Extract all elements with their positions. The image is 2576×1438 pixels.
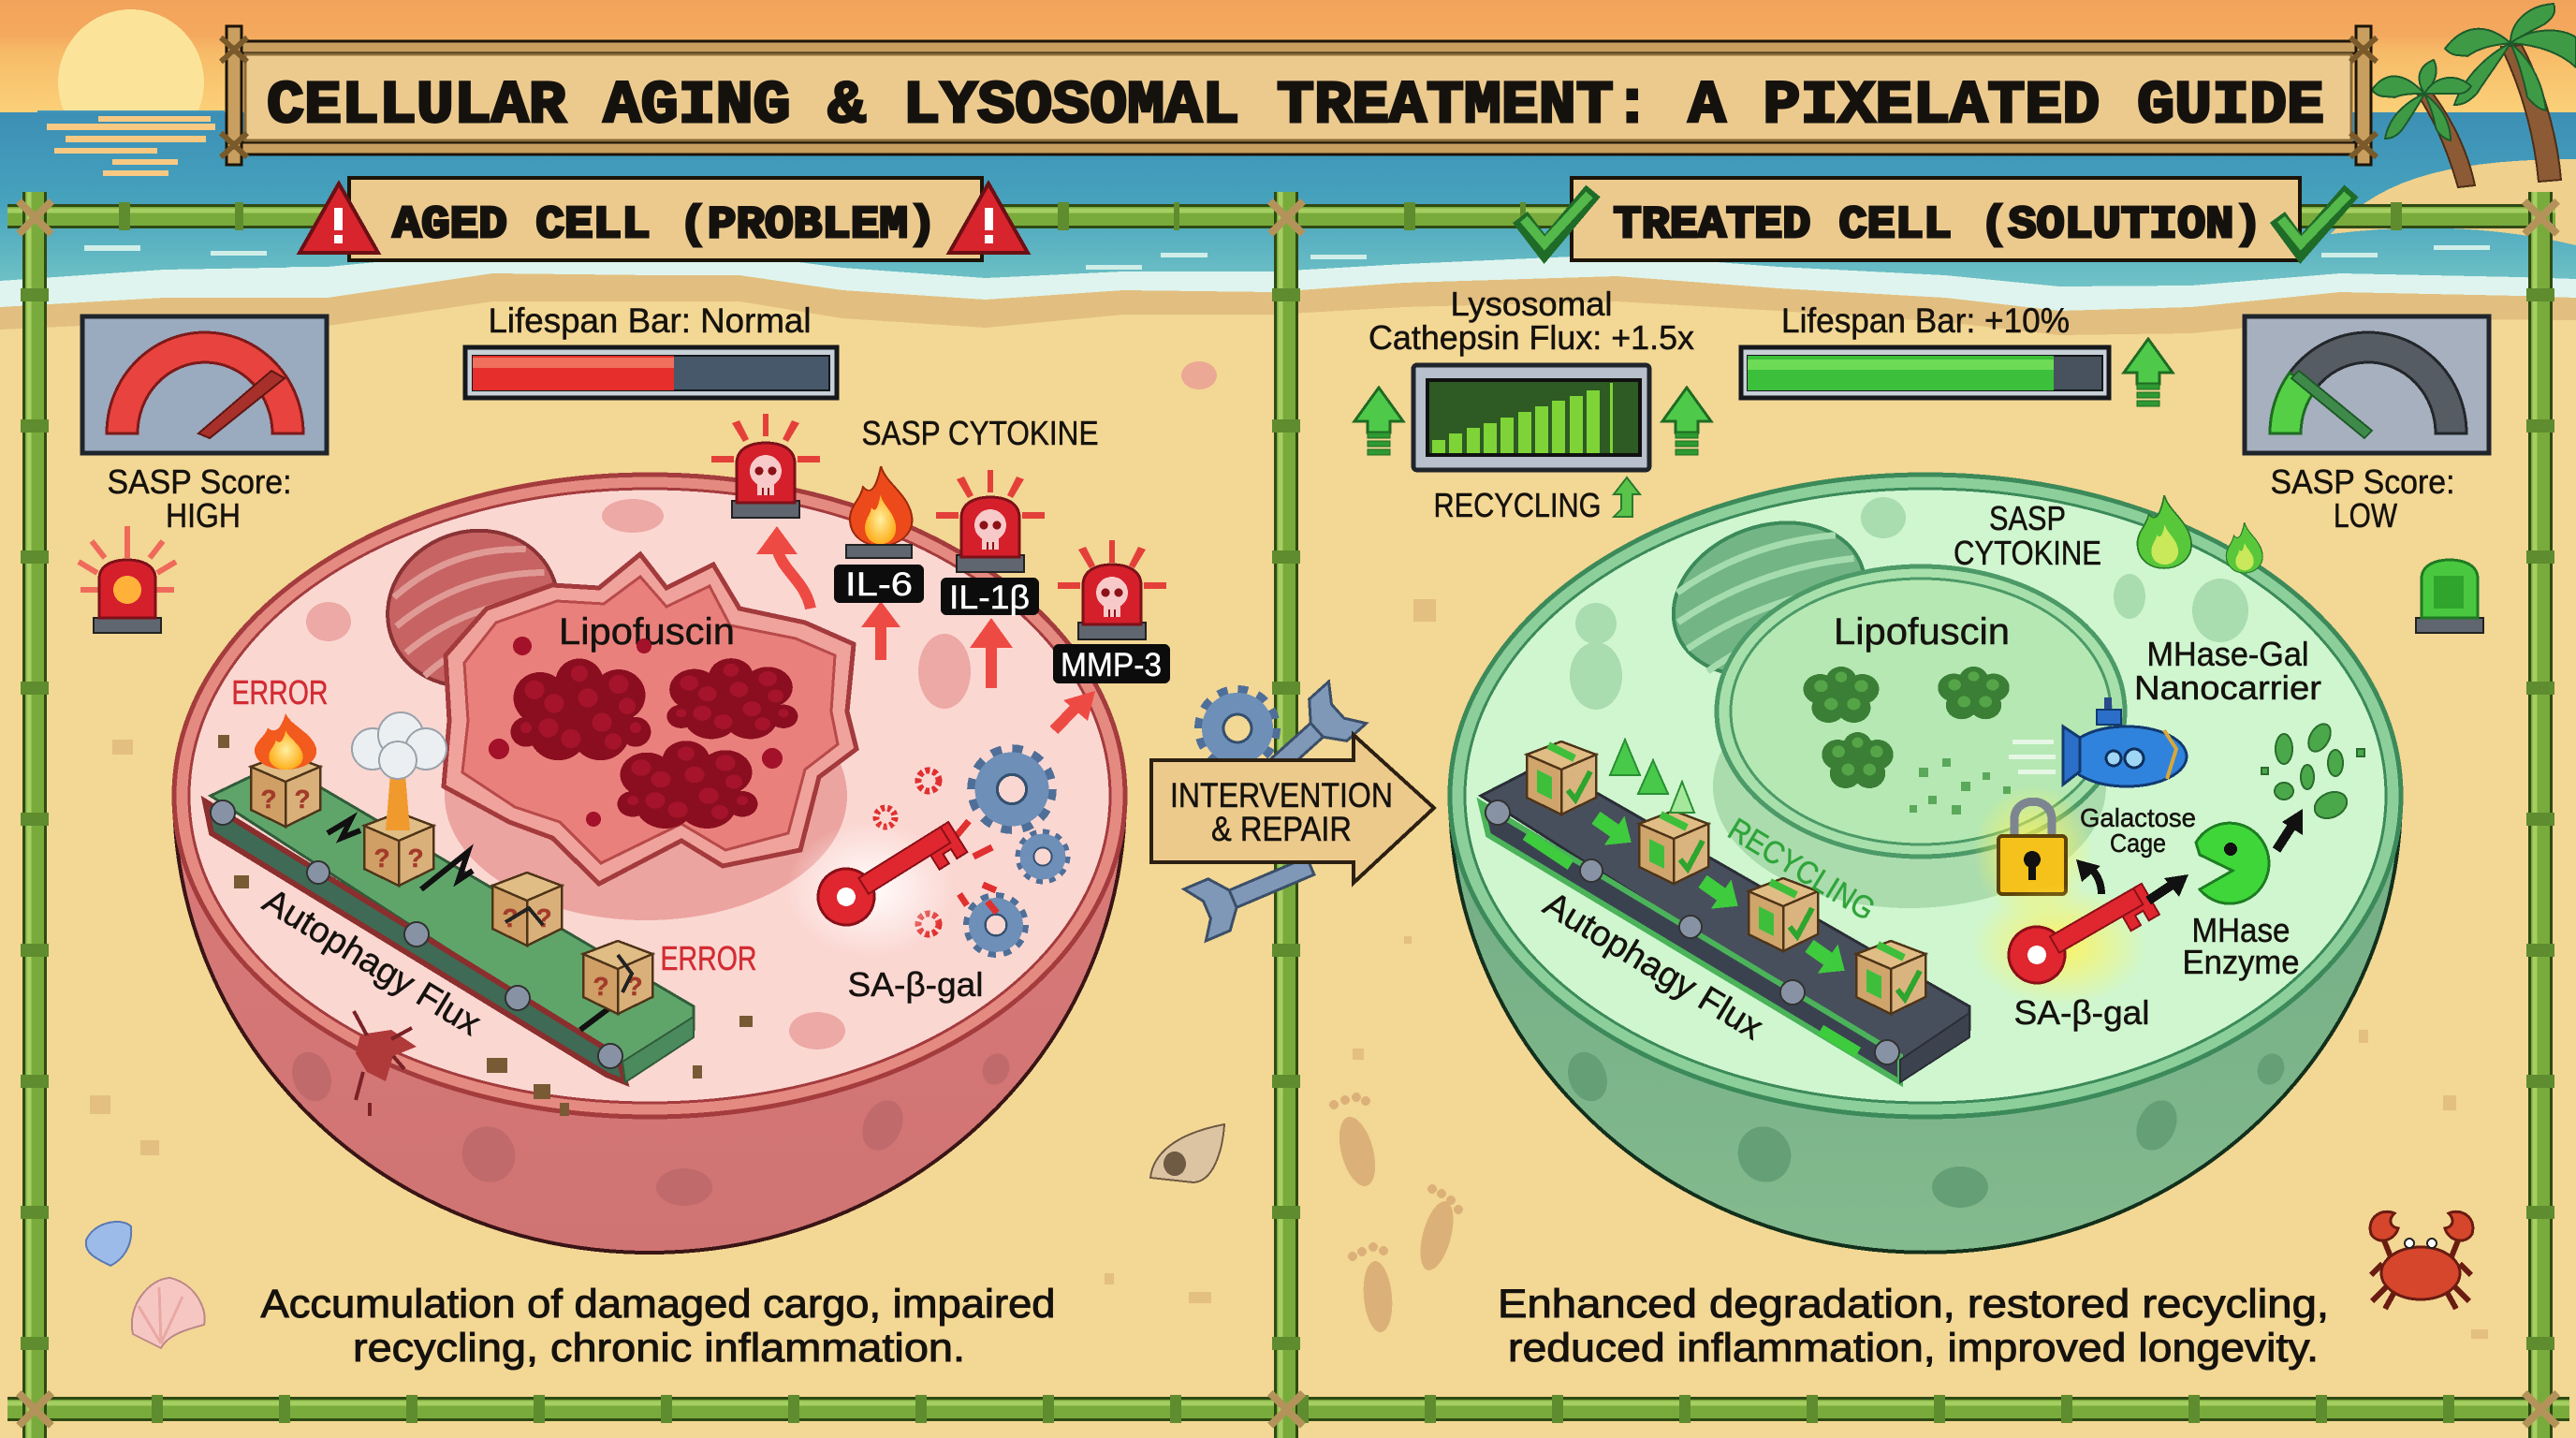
- label: autophagy flux: Autophagy Flux: [256, 881, 488, 1044]
- arrow text: [1170, 776, 1393, 848]
- label: lifespan normal: Lifespan Bar: Normal: [489, 301, 811, 340]
- label: SASP cytokine: CYTOKINE: [1954, 534, 2101, 572]
- key: SA-beta-gal aged: [786, 806, 968, 957]
- lysosome shadow: [1713, 665, 2106, 908]
- caption: treated cell: Enhanced degradation, restored recycling,: [1498, 1282, 2329, 1327]
- lifespan bar: +10%: [1741, 347, 2109, 398]
- damaged lysosome: [444, 554, 856, 884]
- palm island: [2331, 159, 2576, 245]
- icon: siren MMP-3 skull: [1058, 540, 1166, 639]
- cell body side: [1450, 796, 2401, 1253]
- gears: [968, 750, 1067, 953]
- heading text: aged cell: AGED CELL (PROBLEM): [393, 200, 936, 251]
- mitochondrion: [366, 506, 579, 711]
- lipofuscin clumps: [489, 637, 798, 829]
- label: nanocarrier: MHase-Gal: [2147, 635, 2308, 673]
- cell membrane rim: [1450, 475, 2401, 1117]
- label: IL-6: [834, 565, 924, 603]
- label: SASP score high: [107, 462, 292, 535]
- label: autophagy flux: Autophagy Flux: [1537, 885, 1769, 1048]
- label: SA-beta-gal aged: SA-β-gal: [848, 965, 983, 1004]
- healthy lysosome: [1717, 566, 2125, 857]
- label: IL-1beta: IL-1β: [949, 580, 1030, 616]
- label: lipofuscin: Lipofuscin: [559, 611, 735, 653]
- icon: blue shell: [86, 1222, 131, 1266]
- label: SASP cytokine: [1954, 499, 2101, 572]
- label: SASP score low: [2271, 462, 2454, 535]
- caption: aged cell: recycling, chronic inflammation.: [353, 1326, 965, 1371]
- red enzyme fragments: [876, 770, 997, 934]
- label: lipofuscin: Lipofuscin: [1834, 611, 2010, 653]
- cytoplasm spots: [306, 499, 971, 1049]
- cytoplasm spots: [1570, 497, 2248, 710]
- label: lifespan +10%: Lifespan Bar: +10%: [1781, 301, 2070, 340]
- gauge: SASP high: [82, 316, 327, 453]
- wave highlights: [84, 245, 2490, 271]
- caption: aged cell: [260, 1282, 1056, 1371]
- label: SASP cytokine: SASP: [1989, 499, 2066, 537]
- treated boxes: [1527, 741, 1925, 1014]
- icon: siren IL-1beta skull: [936, 470, 1045, 572]
- lifespan bar: normal: [465, 347, 837, 398]
- label: mhase enzyme: [2183, 911, 2299, 981]
- icon: green flame large: [2138, 495, 2191, 568]
- red signalling arrows: [777, 548, 1076, 730]
- icon: membrane tear: [354, 1011, 417, 1116]
- label: error bottom: ERROR: [661, 939, 756, 977]
- label: galactose cage: [2080, 803, 2196, 858]
- green triangles: [1610, 740, 1694, 813]
- icon: lifespan up arrow: [2124, 339, 2173, 406]
- conveyor belt: [1481, 763, 1969, 1082]
- label: SASP score low: LOW: [2334, 496, 2397, 535]
- icon: siren IL-? skull 1: [711, 414, 820, 518]
- label: SA-beta-gal treated: SA-β-gal: [2014, 993, 2149, 1032]
- icon: flux up arrow left: [1354, 388, 1403, 455]
- panel: aged cell: [174, 414, 1170, 1253]
- label: SASP score high: HIGH: [166, 496, 241, 535]
- cytoplasm: [1465, 489, 2386, 1103]
- icon: smoke explosion: [352, 712, 446, 830]
- icon: green alarm light: [2416, 560, 2483, 633]
- label: mhase enzyme: MHase: [2192, 911, 2290, 949]
- label: galactose cage: Galactose: [2080, 803, 2196, 832]
- icon: wrench lower: [1184, 840, 1322, 941]
- icon: warning triangle right: [949, 183, 1028, 253]
- side spots: [285, 1047, 1014, 1206]
- lipofuscin clumps degraded: [1803, 667, 2011, 814]
- green fragments: [2261, 720, 2364, 823]
- icon: footprints: [1329, 1093, 1463, 1333]
- icon: crab: [2370, 1211, 2473, 1309]
- label: SASP score high: SASP Score:: [107, 462, 292, 501]
- cell shadow on sand: [183, 843, 1117, 1246]
- caption: aged cell: Accumulation of damaged cargo, impaired: [260, 1282, 1056, 1327]
- intervention arrow: [1151, 682, 1434, 941]
- label: SASP cytokine: SASP CYTOKINE: [861, 414, 1099, 452]
- panel: aged cell heading: [300, 178, 1028, 260]
- palm trees: [2372, 4, 2576, 187]
- caption: treated cell: [1498, 1282, 2329, 1371]
- icon: recycling arrow: [1614, 477, 1640, 517]
- chart: cathepsin flux labels: Lysosomal: [1451, 285, 1612, 323]
- sea: [0, 112, 2576, 309]
- label: recycling: RECYCLING: [1434, 486, 1601, 524]
- foam shoreline: [0, 251, 2576, 328]
- icon: flux up arrow right: [1662, 388, 1711, 455]
- chart: cathepsin flux labels: [1368, 285, 1694, 357]
- icon: padlock: [1972, 785, 2094, 919]
- arrow text: & REPAIR: [1211, 810, 1352, 848]
- conveyor belt: [205, 763, 694, 1082]
- belt direction arrows: [1586, 803, 1855, 985]
- side spots: [1561, 1047, 2289, 1208]
- icon: check right: [2277, 191, 2351, 249]
- sun reflection on water: [47, 116, 215, 176]
- chart: cathepsin flux labels: Cathepsin Flux: +1.5x: [1368, 318, 1694, 357]
- icon: green flame small: [2226, 522, 2262, 573]
- nanocarrier speed lines: [2009, 740, 2056, 774]
- label: error top: ERROR: [232, 673, 328, 712]
- sky background: [0, 0, 2576, 117]
- icon: gear on arrow: [1200, 691, 1275, 766]
- icon: setting sun: [37, 9, 225, 167]
- arrowheads: [756, 526, 1095, 721]
- icon: mhase enzyme pacman: [2196, 823, 2269, 903]
- black pathway arrows: [2076, 809, 2303, 901]
- icon: red alarm light: [79, 526, 176, 633]
- cell shadow on sand: [1458, 843, 2393, 1246]
- gauge: SASP low: [2245, 316, 2489, 453]
- icon: wrench upper: [1236, 682, 1367, 807]
- lysosome shadow: [445, 671, 847, 920]
- label: galactose cage: Cage: [2110, 829, 2166, 858]
- icon: pink scallop shell: [132, 1278, 205, 1348]
- cell membrane rim: [174, 475, 1125, 1117]
- heading text: treated cell: TREATED CELL (SOLUTION): [1614, 200, 2261, 251]
- damaged boxes: [251, 754, 652, 1014]
- wet sand band: [0, 273, 2576, 335]
- label: mhase enzyme: Enzyme: [2183, 943, 2299, 981]
- title banner: [221, 26, 2377, 165]
- caption: treated cell: reduced inflammation, improved longevity.: [1508, 1326, 2319, 1371]
- arrow text: INTERVENTION: [1170, 776, 1393, 814]
- label: recycling on belt: RECYCLING: [1721, 812, 1881, 928]
- label: MMP-3: MMP-3: [1061, 647, 1162, 683]
- label: nanocarrier: [2134, 635, 2321, 707]
- debris: [218, 735, 753, 1116]
- icon: flame IL-6: [846, 466, 912, 558]
- icon: fire on box: [255, 713, 316, 770]
- sand speckles: [90, 599, 2488, 1339]
- label: SASP score low: SASP Score:: [2271, 462, 2454, 501]
- icon: conch shell: [1150, 1124, 1224, 1182]
- title text: CELLULAR AGING & LYSOSOMAL TREATMENT: A PIXELATED GUIDE: [267, 73, 2324, 140]
- label: nanocarrier: Nanocarrier: [2134, 668, 2321, 707]
- mitochondrion: [1652, 497, 1886, 701]
- cytoplasm: [189, 489, 1110, 1103]
- key: SA-beta-gal treated: [1970, 868, 2160, 1006]
- chart: flux monitor: [1413, 365, 1649, 470]
- icon: check left: [1520, 191, 1593, 249]
- icon: warning triangle left: [300, 183, 378, 253]
- cell body side: [174, 796, 1125, 1253]
- icon: submarine: [2063, 697, 2187, 786]
- label: IL-6: IL-6: [845, 566, 913, 603]
- panel: treated cell: [1450, 475, 2401, 1253]
- icon: small pink shell: [1181, 361, 1217, 389]
- arrow body: [1151, 735, 1434, 883]
- panel: treated cell heading: [1520, 178, 2351, 260]
